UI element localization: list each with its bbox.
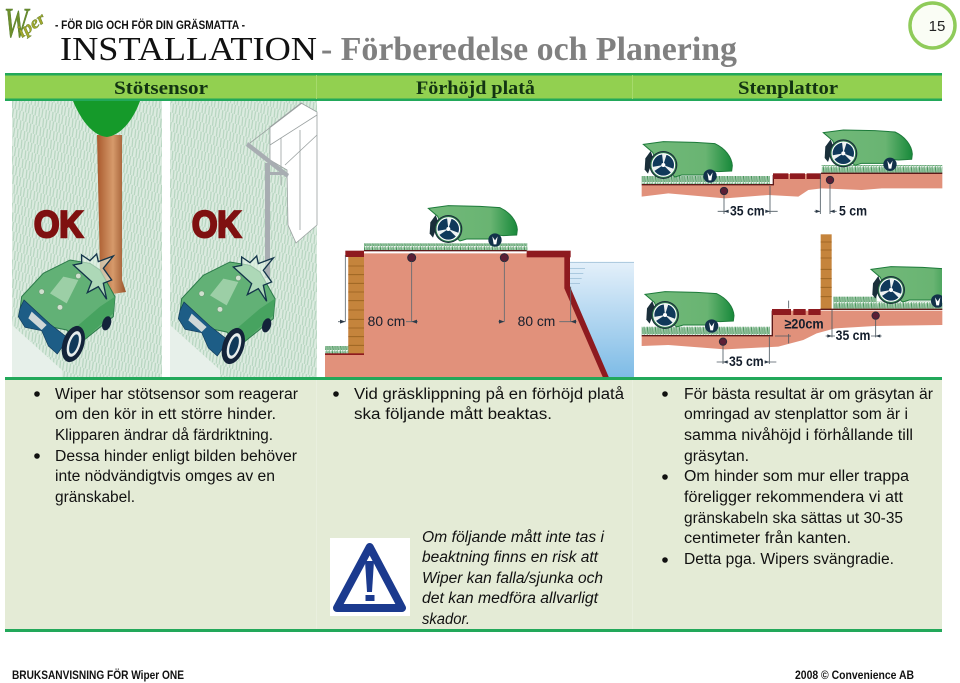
lower diagram (642, 234, 942, 369)
text block: Förhöjd platå: ska följande mått beaktas. (354, 406, 552, 423)
text block: Stenplattor (662, 386, 933, 568)
page number badge: 15 (929, 18, 945, 35)
upper diagram: 5 cm (839, 202, 867, 218)
warning text: skador. (422, 611, 470, 628)
text block: Stötsensor: om den kör in ett större hinder. (55, 406, 276, 423)
mower top view (178, 256, 275, 367)
footer right: 2008 © Convenience AB (795, 670, 914, 682)
text block: Stenplattor: För bästa resultat är om gräsytan är (684, 386, 933, 403)
text block: Stenplattor: centimeter från kanten. (684, 530, 851, 547)
tagline: - FÖR DIG OCH FÖR DIN GRÄSMATTA - (55, 19, 245, 32)
text panel background (5, 377, 942, 632)
text block: Stötsensor: Dessa hinder enligt bilden behöver (55, 448, 297, 465)
upper diagram (642, 130, 942, 218)
pole (246, 142, 289, 278)
warning text (422, 529, 605, 628)
text block: Stötsensor (34, 386, 298, 506)
title: INSTALLATION (60, 31, 317, 68)
heading: Stötsensor: Stötsensor (114, 78, 209, 99)
lower diagram: ≥20cm (784, 316, 824, 332)
logo: Wiper: W (4, 1, 31, 47)
mower top view (18, 254, 115, 365)
text block: Stötsensor: Wiper har stötsensor som reagerar (55, 386, 298, 403)
illustration: mower hits tree (12, 101, 162, 377)
boundary cables (408, 254, 508, 262)
water level lines (570, 263, 634, 283)
logo: Wiper: iper (13, 8, 49, 41)
brick wall (348, 257, 364, 354)
warning text: beaktning finns en risk att (422, 549, 599, 566)
warning text: Om följande mått inte tas i (422, 529, 605, 546)
tree trunk (97, 135, 126, 294)
title: - Förberedelse och Planering (321, 31, 737, 68)
label: 80 cm left: 80 cm (368, 313, 405, 329)
tree foliage (73, 101, 140, 137)
OK mark: OK (192, 204, 241, 245)
text block: Stenplattor: Om hinder som mur eller trappa (684, 468, 909, 485)
text block: Stötsensor: gränskabel. (55, 489, 135, 506)
text block: Förhöjd platå: Vid gräsklippning på en förhöjd platå (354, 386, 624, 403)
text block: Stenplattor: föreligger rekommendera vi att (684, 489, 904, 506)
text block: Stenplattor: gräsytan. (684, 448, 749, 465)
icon: warning triangle (330, 538, 410, 616)
text block: Stenplattor: omringad av stenplattor som är i (684, 406, 908, 423)
heading: Stenplattor: Stenplattor (738, 78, 839, 99)
warning text: det kan medföra allvarligt (422, 590, 599, 607)
dimension lines (338, 255, 577, 324)
label: 80 cm right: 80 cm (518, 313, 555, 329)
OK mark: OK (34, 204, 83, 245)
page number badge (910, 3, 955, 48)
illustration: mower hits pole (170, 101, 317, 377)
lower diagram: 35 cm (729, 353, 764, 369)
water (567, 262, 634, 378)
text block: Stenplattor: samma nivåhöjd i förhållande till (684, 427, 913, 444)
header band with column headings (5, 73, 942, 101)
text block: Stötsensor: Klipparen ändrar då färdriktning. (55, 427, 273, 444)
building corner (270, 103, 317, 243)
text block: Förhöjd platå (333, 386, 624, 423)
mower clipped at right edge (870, 266, 942, 308)
illustration: raised plateau (325, 206, 634, 378)
text block: Stötsensor: inte nödvändigtvis omges av en (55, 468, 275, 485)
text block: Stenplattor: Detta pga. Wipers svängradie. (684, 551, 894, 568)
text block: Stenplattor: gränskabeln ska sättas ut 30-35 (684, 510, 903, 527)
mower (428, 206, 517, 247)
soil (325, 253, 607, 378)
upper diagram: 35 cm (730, 202, 765, 218)
heading: Förhöjd platå: Förhöjd platå (416, 78, 536, 99)
grass (325, 243, 527, 354)
coping and pool edge (325, 250, 609, 378)
warning text: Wiper kan falla/sjunka och (422, 570, 603, 587)
lower diagram: 35 cm (836, 327, 870, 343)
title (60, 31, 737, 68)
illustration: paving stones (642, 130, 942, 369)
footer left: BRUKSANVISNING FÖR Wiper ONE (12, 669, 184, 682)
